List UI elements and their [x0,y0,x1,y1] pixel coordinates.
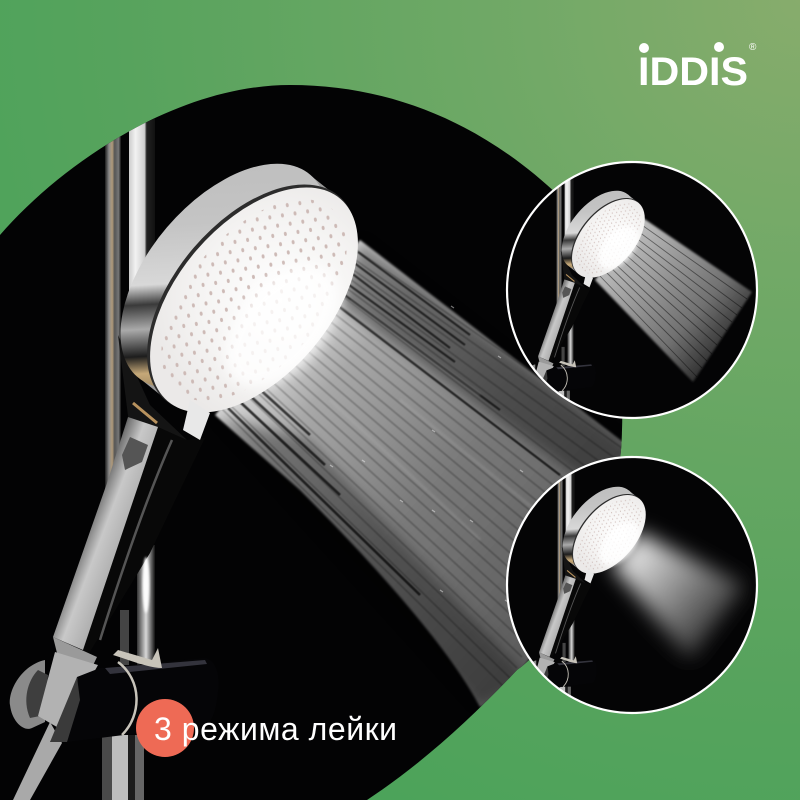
badge: coral circle [136,699,194,757]
rod light flare [142,557,150,613]
inset two mist beam [612,532,745,660]
inset two fixture [533,472,646,696]
inset one fixture [532,178,645,400]
logo: iddis: ® [749,42,757,53]
inset two border [507,457,757,713]
inset: spray mode two [507,429,757,716]
inset: spray mode one [507,133,757,420]
inset one spray [595,218,752,382]
main shower spray [215,240,640,707]
inset one lower rod [555,410,570,420]
shower fixture: head, handle, rods and bracket [10,118,358,800]
caption: 3 режима лейки [154,711,397,747]
panel: main photo blob [0,85,622,800]
inset two lower rod [556,706,571,716]
logo: iddis: IDDIS [638,50,748,94]
inset one border [507,162,757,418]
